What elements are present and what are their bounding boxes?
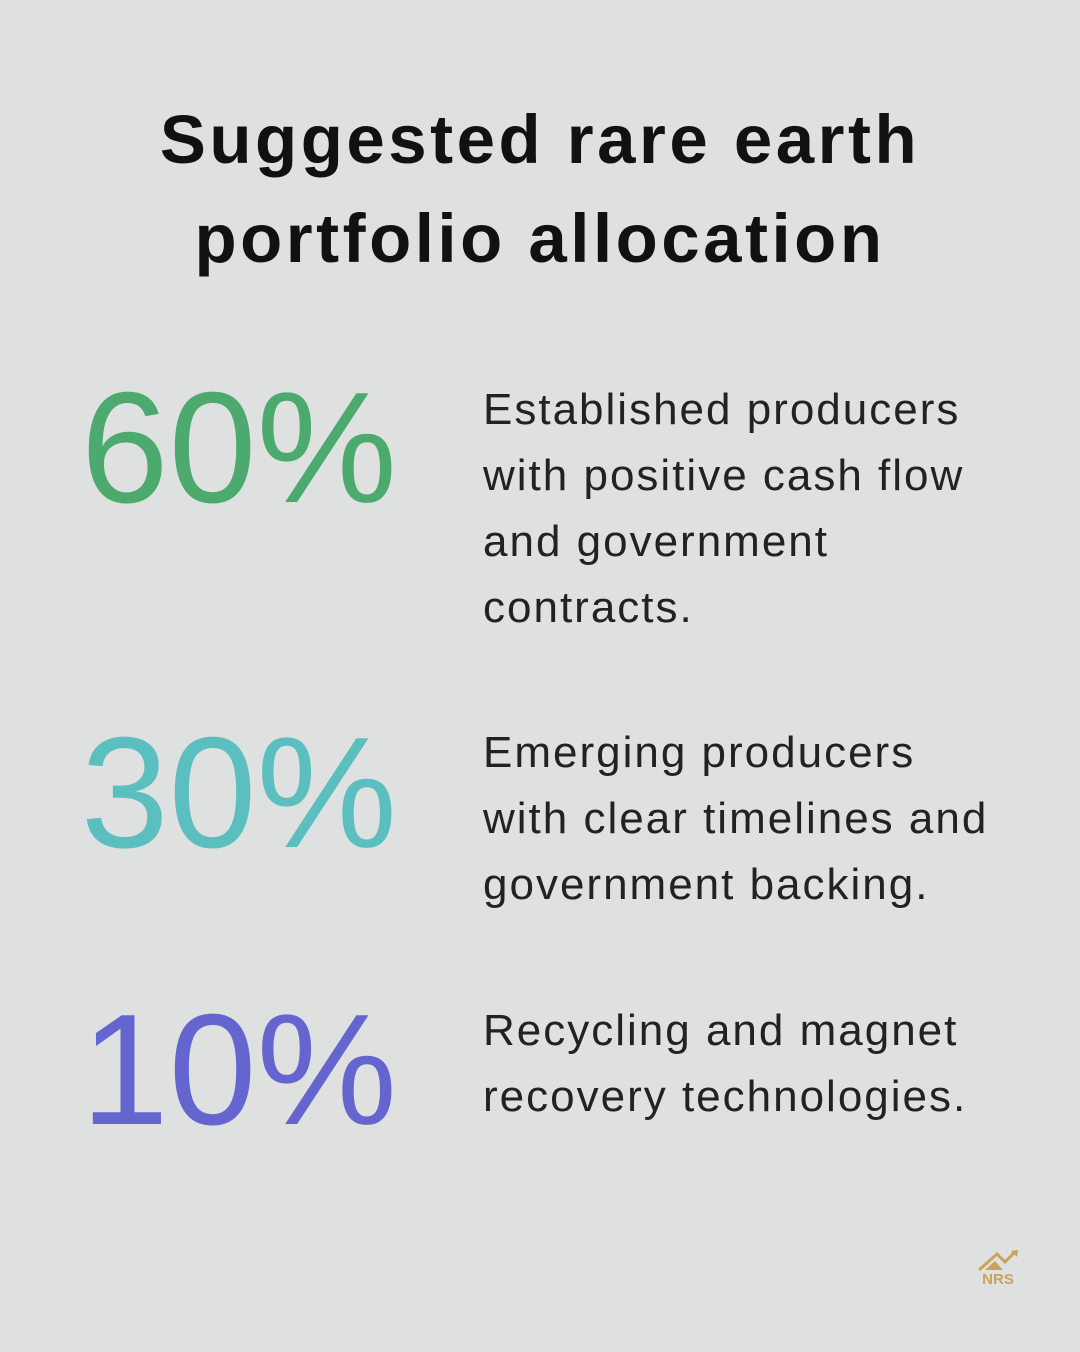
text: emerging producers: with clear timelines and	[483, 794, 988, 843]
title: portfolio allocation	[195, 200, 885, 277]
stat: 10%: 10%	[81, 982, 397, 1158]
text: emerging producers: government backing.	[483, 860, 929, 909]
text: recycling: Recycling and magnet	[483, 1006, 958, 1055]
stat: 30%: 30%	[81, 705, 397, 881]
logo: NRS	[978, 1250, 1018, 1288]
text: established producers	[483, 385, 964, 632]
text: established producers: with positive cash flow	[483, 451, 964, 500]
stat: 60%: 60%	[81, 360, 397, 536]
text: recycling: recovery technologies.	[483, 1072, 967, 1121]
text: emerging producers: Emerging producers	[483, 728, 915, 777]
text: emerging producers	[483, 728, 988, 909]
title	[160, 101, 920, 277]
text: established producers: contracts.	[483, 583, 694, 632]
text: established producers: Established producers	[483, 385, 960, 434]
text: established producers: and government	[483, 517, 829, 566]
text: recycling	[483, 1006, 967, 1121]
logo: NRS: NRS	[982, 1271, 1014, 1288]
title: Suggested rare earth	[160, 101, 920, 178]
